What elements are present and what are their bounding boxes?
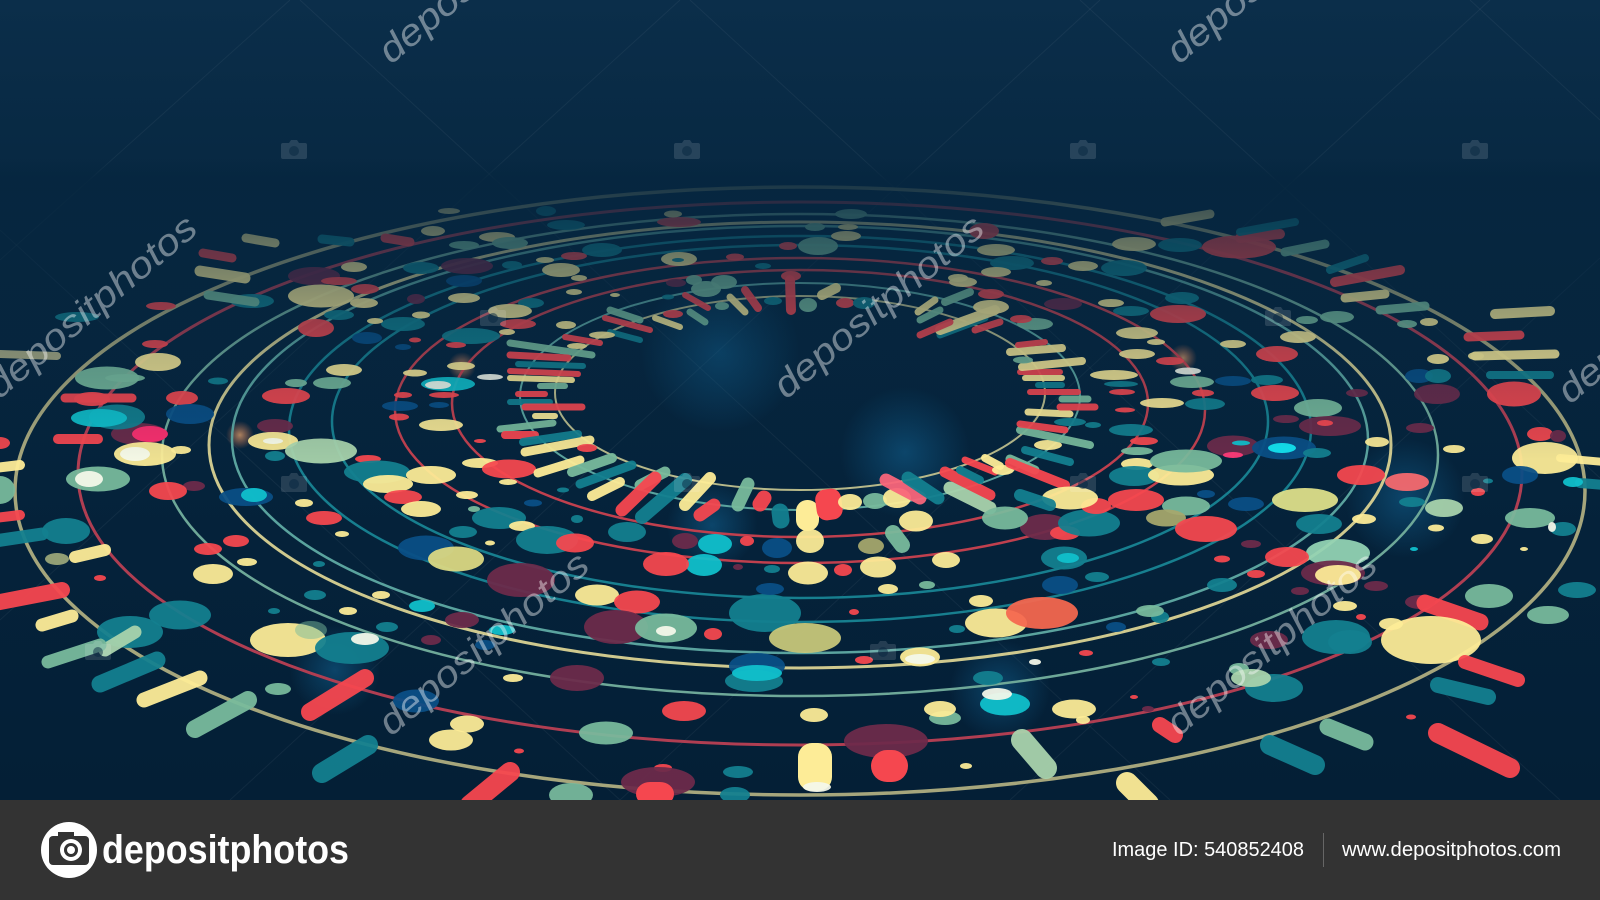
dots: middle left field (0, 294, 646, 581)
capsules: upper right band (1165, 214, 1555, 375)
watermark texts: depositphotos (765, 206, 992, 406)
dots: upper left field (262, 206, 801, 404)
watermark texts: depositphotos (1158, 543, 1385, 743)
capsules: lower left band (48, 632, 674, 806)
footer brand name: depositphotos (102, 828, 349, 872)
capsules: inner ring right (796, 277, 1101, 531)
dots: middle right field (1108, 427, 1600, 551)
concentric perspective rings (15, 187, 1585, 795)
footer logo camera icon (41, 822, 97, 878)
capsules: inner ring left (482, 280, 791, 520)
watermark texts: depositphotos (370, 543, 597, 743)
footer bar (0, 800, 1600, 900)
dots: upper right field (798, 209, 1541, 470)
watermark camera icons (85, 140, 1488, 660)
dots: lower right field (769, 486, 1596, 804)
glow spots (226, 272, 1465, 740)
perspective fade overlay (0, 160, 1600, 460)
capsules: left outer band (0, 238, 410, 625)
dots: lower left field (97, 533, 801, 807)
website url: www.depositphotos.com (1341, 839, 1561, 861)
image id: Image ID: 540852408 (1112, 839, 1304, 861)
